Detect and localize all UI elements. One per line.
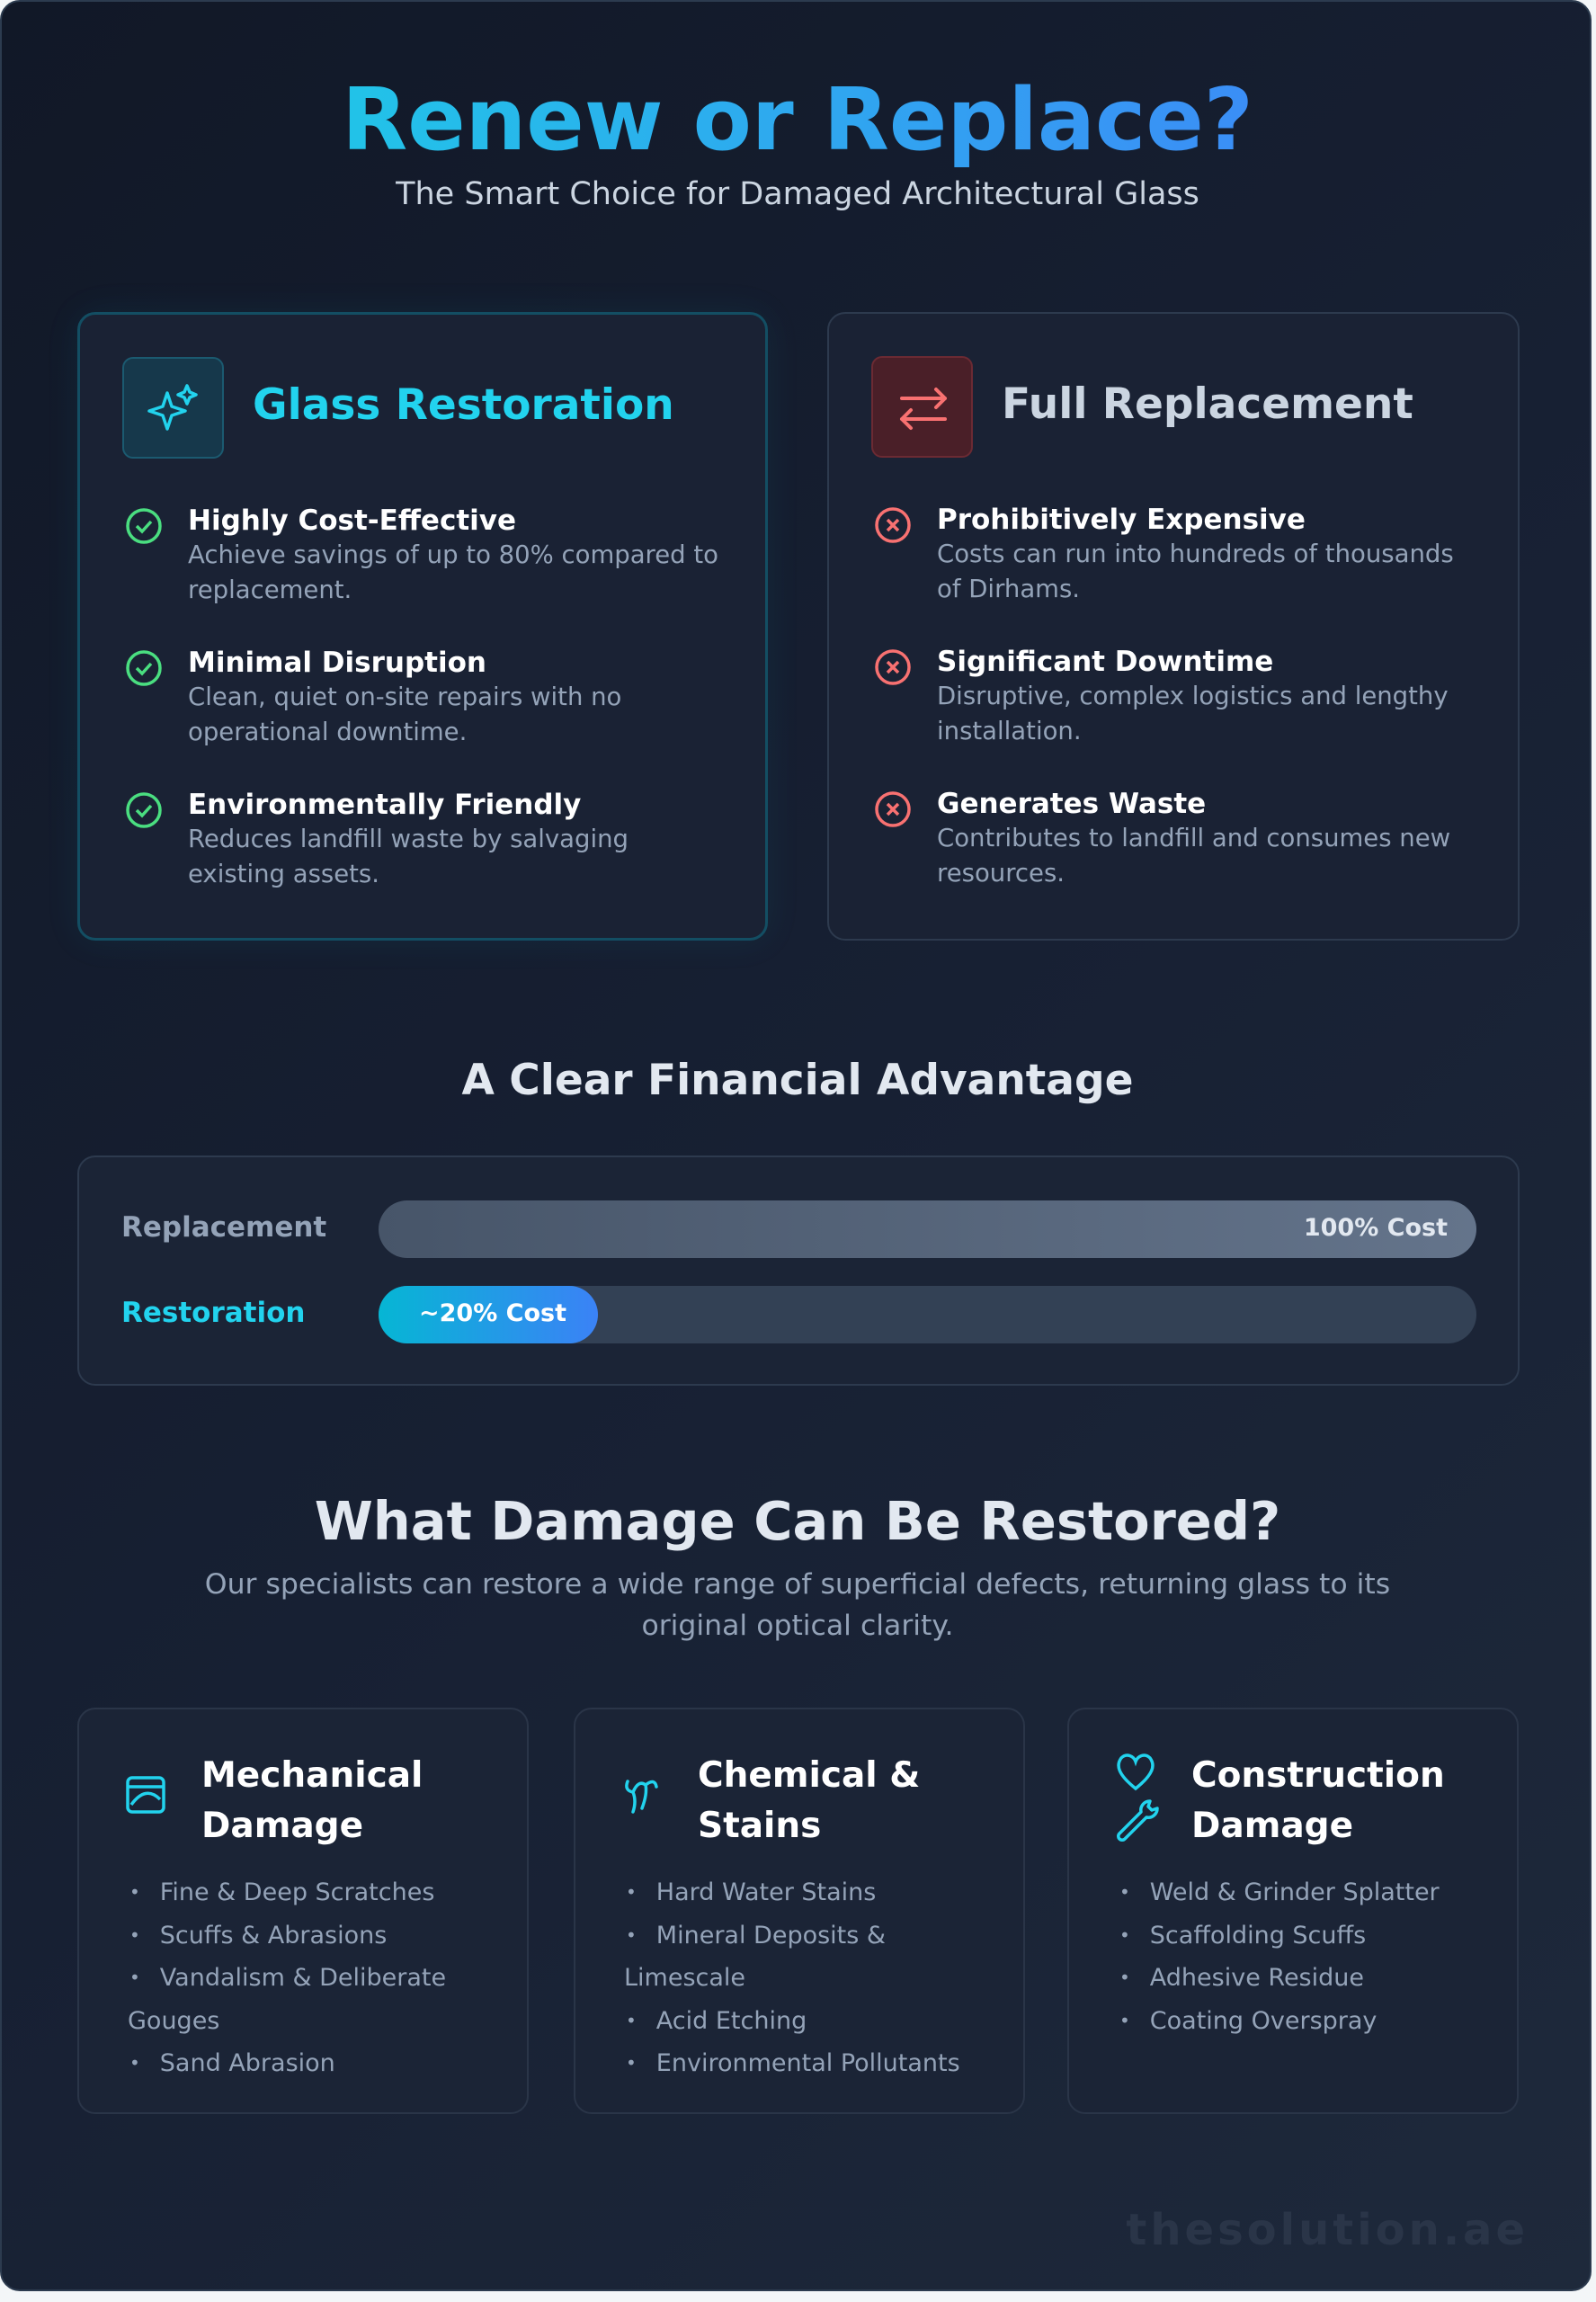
item 2 <box>126 647 621 746</box>
heading: Full Replacement <box>1002 379 1413 429</box>
watermark: thesolution.ae <box>1126 2205 1529 2255</box>
panel: construction <box>1067 1708 1519 2114</box>
item 3: Generates Waste <box>937 788 1206 820</box>
icon: drops <box>625 1780 658 1814</box>
icon: sparkles <box>122 357 224 459</box>
list: Scaffolding Scuffs <box>1150 1921 1366 1950</box>
bar: restoration: ~20% Cost <box>419 1299 566 1327</box>
title: Damage <box>1191 1806 1353 1846</box>
list: Hard Water Stains <box>656 1878 876 1906</box>
intro text: Our specialists can restore a wide range of superficial defects, returning glass to its original optical clarity. <box>205 1568 1390 1642</box>
bar: replacement <box>379 1200 1476 1258</box>
title <box>1191 1755 1445 1846</box>
list: Adhesive Residue <box>1150 1964 1364 1992</box>
list: Acid Etching <box>656 2007 807 2034</box>
title: Mechanical <box>201 1755 423 1796</box>
list: Scuffs & Abrasions <box>160 1921 387 1950</box>
list <box>128 1878 446 2077</box>
item 3: Contributes to landfill and consumes new resources. <box>937 824 1450 888</box>
panel: chemical <box>574 1708 1025 2114</box>
item 1: Achieve savings of up to 80% compared to replacement. <box>188 540 718 604</box>
item 1: Costs can run into hundreds of thousands of Dirhams. <box>937 540 1454 603</box>
bar chart <box>77 1155 1520 1386</box>
icon: heart and wrench <box>1117 1753 1159 1842</box>
item 1 <box>126 504 718 604</box>
item 3: Environmentally Friendly <box>188 789 581 821</box>
item 3 <box>126 789 629 888</box>
item 1 <box>875 504 1454 603</box>
title: Renew or Replace? <box>342 71 1253 170</box>
list: Weld & Grinder Splatter <box>1150 1878 1440 1906</box>
bar: replacement: 100% Cost <box>1304 1214 1448 1242</box>
item 3 <box>875 788 1450 888</box>
list <box>1122 1878 1440 2034</box>
list: Environmental Pollutants <box>656 2049 960 2077</box>
item 1: Prohibitively Expensive <box>937 504 1306 536</box>
list: Fine & Deep Scratches <box>160 1878 434 1906</box>
heading: financial advantage: A Clear Financial Advantage <box>461 1056 1134 1105</box>
item 2 <box>875 646 1449 745</box>
item 3: Reduces landfill waste by salvaging existing assets. <box>188 825 629 888</box>
list: Sand Abrasion <box>160 2049 335 2077</box>
title <box>698 1755 920 1846</box>
item 2: Significant Downtime <box>937 646 1273 678</box>
heading: damage: What Damage Can Be Restored? <box>315 1490 1280 1552</box>
panel: glass restoration <box>77 312 768 941</box>
item 2: Clean, quiet on-site repairs with no operational downtime. <box>188 683 621 746</box>
bar: restoration <box>379 1286 1476 1343</box>
list: Coating Overspray <box>1150 2007 1377 2034</box>
subtitle: The Smart Choice for Damaged Architectural Glass <box>396 176 1199 212</box>
title: Construction <box>1191 1755 1445 1796</box>
item 1: Highly Cost-Effective <box>188 504 516 537</box>
item 2: Disruptive, complex logistics and lengthy installation. <box>937 682 1449 745</box>
panel: full replacement <box>827 312 1520 941</box>
label: replacement: Replacement <box>121 1211 326 1244</box>
title: Stains <box>698 1806 821 1846</box>
title <box>201 1755 423 1846</box>
panel: mechanical <box>77 1708 529 2114</box>
list <box>624 1878 960 2077</box>
title: Chemical & <box>698 1755 920 1796</box>
list: Vandalism & Deliberate Gouges <box>128 1964 446 2034</box>
icon: window <box>126 1776 165 1814</box>
label: restoration: Restoration <box>121 1297 305 1329</box>
icon: swap arrows <box>871 356 973 458</box>
heading: Glass Restoration <box>253 380 674 430</box>
title: Damage <box>201 1806 363 1846</box>
item 2: Minimal Disruption <box>188 647 486 679</box>
list: Mineral Deposits & Limescale <box>624 1921 886 1992</box>
